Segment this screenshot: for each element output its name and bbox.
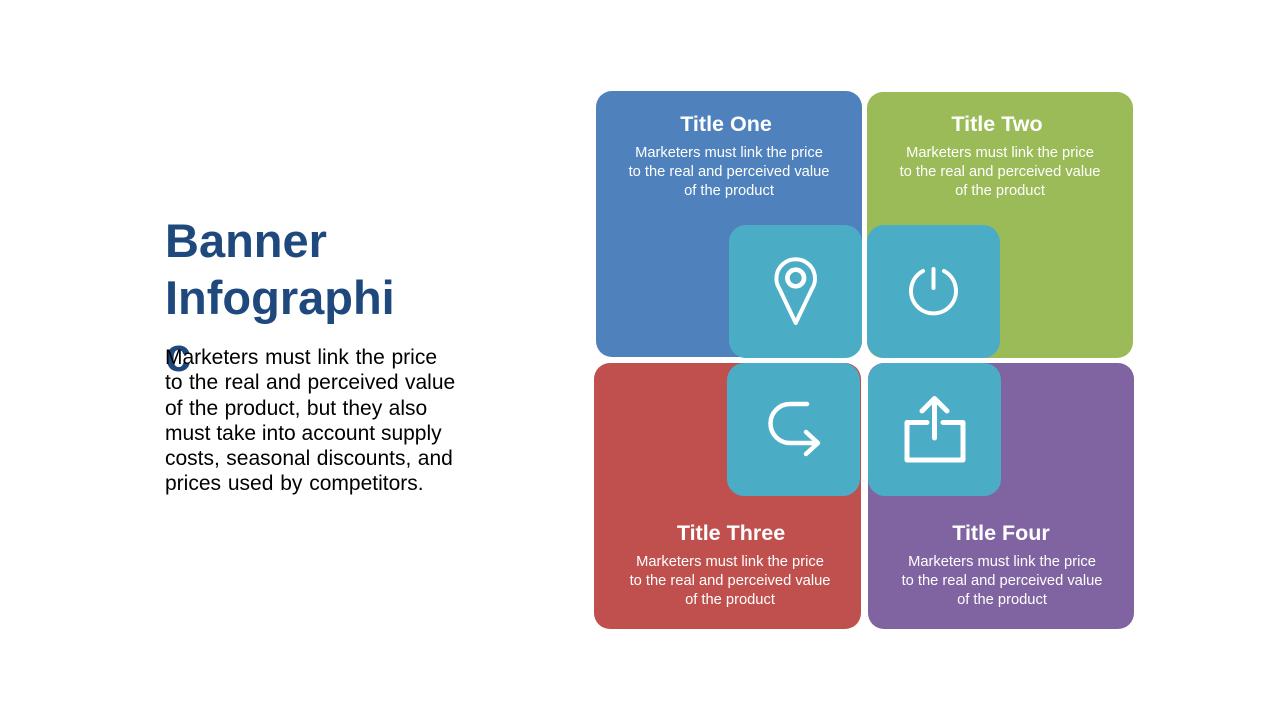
- description: title two: to the real and perceived value: [900, 164, 1100, 180]
- icon tile: location pin: [729, 225, 862, 358]
- body text: of the product, but they also: [165, 397, 427, 420]
- description: title one: Marketers must link the price: [635, 145, 823, 161]
- body text: costs, seasonal discounts, and: [165, 447, 453, 470]
- body text: must take into account supply: [165, 422, 442, 445]
- description: title four: of the product: [957, 592, 1047, 608]
- panel: title four: [868, 363, 1134, 629]
- icon tile: share: [868, 363, 1001, 496]
- body text: Marketers must link the price: [165, 346, 437, 369]
- icon: power: [909, 267, 958, 316]
- description: title three: [630, 554, 830, 608]
- body text: [165, 346, 455, 495]
- description: title four: to the real and perceived value: [902, 573, 1102, 589]
- title: c: [165, 328, 191, 381]
- panel: title one: [596, 91, 862, 357]
- heading: title one: Title One: [680, 112, 772, 136]
- description: title two: [900, 145, 1100, 199]
- panel: title two: [867, 92, 1133, 358]
- description: title three: Marketers must link the price: [636, 554, 824, 570]
- description: title three: to the real and perceived value: [630, 573, 830, 589]
- description: title one: to the real and perceived value: [629, 164, 829, 180]
- heading: title four: Title Four: [952, 521, 1050, 545]
- body text: prices used by competitors.: [165, 472, 424, 495]
- body text: to the real and perceived value: [165, 371, 455, 394]
- description: title one: [628, 145, 829, 199]
- description: title four: Marketers must link the price: [908, 554, 1096, 570]
- icon tile: curved arrow: [727, 363, 860, 496]
- description: title three: of the product: [685, 592, 775, 608]
- description: title one: of the product: [684, 183, 774, 199]
- panel: title three: [594, 363, 861, 629]
- icon: share: [904, 396, 966, 462]
- icon: curved arrow: [768, 402, 820, 456]
- icon tile: power: [867, 225, 1000, 358]
- description: title two: of the product: [955, 183, 1045, 199]
- description: title four: [902, 554, 1102, 608]
- heading: title two: Title Two: [951, 112, 1043, 136]
- title: Infographi: [165, 271, 395, 324]
- heading: title three: Title Three: [677, 521, 785, 545]
- icon: location pin: [774, 257, 817, 326]
- title: Banner: [165, 214, 327, 267]
- title: [165, 214, 395, 381]
- description: title two: Marketers must link the price: [906, 145, 1094, 161]
